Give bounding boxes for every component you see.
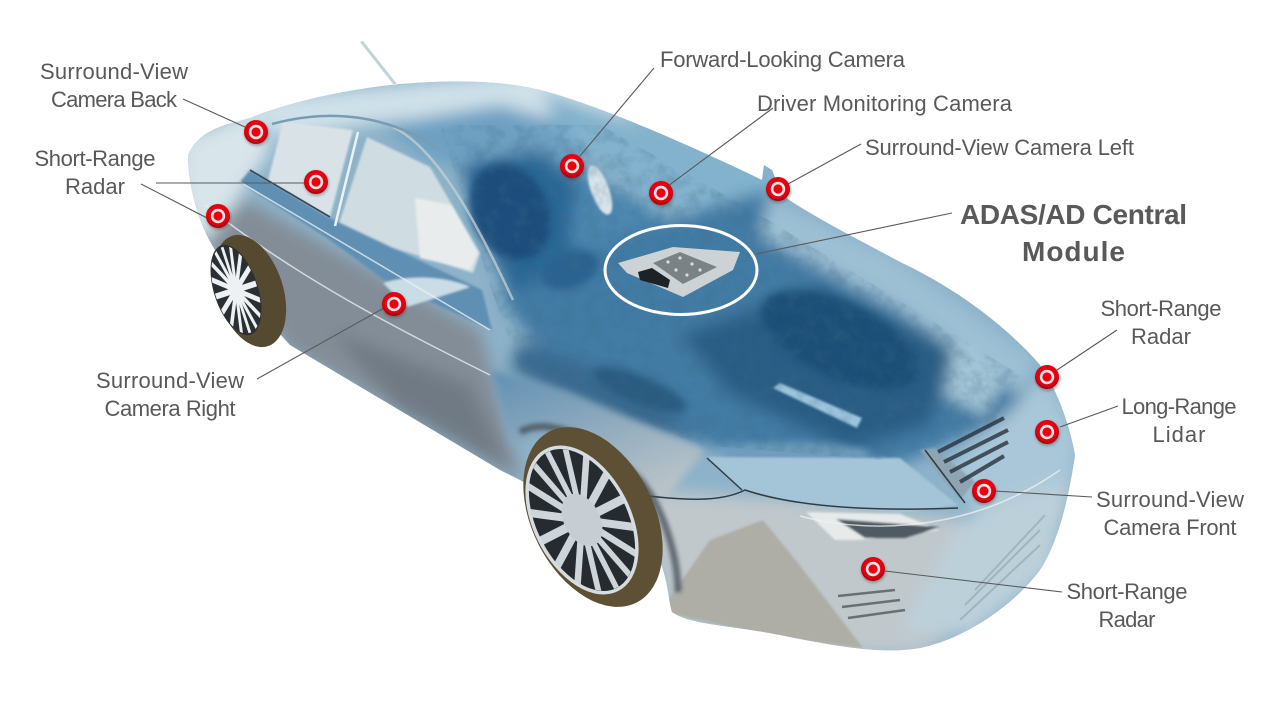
label: Driver Monitoring Camera: Driver Monitoring Camera — [757, 91, 1013, 116]
noise texture on interior and hood — [452, 125, 1018, 460]
label: Forward-Looking Camera: Forward-Looking Camera — [660, 47, 906, 72]
label: Surround-View Camera Front: Surround-View — [1096, 487, 1244, 512]
label: Short-Range Radar front bottom: Short-Range — [1066, 579, 1188, 604]
label: Short-Range Radar rear: Short-Range — [34, 146, 156, 171]
side windows and sill — [240, 122, 975, 648]
fender — [492, 370, 705, 505]
label: Surround-View Camera Right — [96, 292, 407, 421]
label: ADAS/AD Central Module — [756, 199, 1187, 267]
ECU connector — [638, 268, 670, 288]
label: Short-Range Radar front bottom: Radar — [1098, 607, 1156, 632]
label: Surround-View Camera Back: Surround-View — [40, 59, 188, 84]
label: Surround-View Camera Front — [972, 479, 1244, 540]
label: Surround-View Camera Front: Camera Front — [1104, 515, 1236, 540]
label: Surround-View Camera Left — [766, 135, 1134, 203]
label: Forward-Looking Camera — [560, 47, 906, 180]
car illustration — [180, 41, 1090, 670]
label: Driver Monitoring Camera — [649, 91, 1013, 207]
fog lamp — [838, 590, 905, 618]
label: ADAS/AD Central Module: ADAS/AD Central — [960, 199, 1187, 230]
label: Long-Range Lidar: Lidar — [1152, 422, 1206, 447]
wheel arch — [520, 427, 678, 592]
label: ADAS/AD Central Module: Module — [1022, 236, 1125, 267]
label: Short-Range Radar front top — [1035, 296, 1222, 391]
label: Surround-View Camera Right: Camera Right — [104, 396, 236, 421]
headlight and body lines — [640, 450, 965, 509]
label: Long-Range Lidar: Long-Range — [1122, 394, 1236, 419]
label: Short-Range Radar rear — [34, 146, 329, 230]
label: Short-Range Radar rear: Radar — [65, 174, 125, 199]
front wheel — [495, 404, 691, 630]
interior dark patches and engine detail — [464, 159, 918, 458]
ADAS/AD central module: highlighted ECU — [605, 226, 757, 314]
grille — [938, 418, 1008, 482]
label: Short-Range Radar front top: Radar — [1131, 324, 1191, 349]
A-pillar — [393, 127, 513, 300]
label: Short-Range Radar front top: Short-Range — [1100, 296, 1222, 321]
label: Surround-View Camera Right: Surround-View — [96, 368, 244, 393]
label: Long-Range Lidar — [1035, 394, 1236, 447]
label: Surround-View Camera Back: Camera Back — [51, 87, 178, 112]
antenna — [360, 41, 397, 84]
side window frame — [250, 170, 330, 217]
label: Surround-View Camera Back — [40, 59, 269, 146]
rear wheel — [201, 226, 299, 356]
label: Short-Range Radar front bottom — [861, 557, 1188, 632]
highlight ring — [605, 226, 757, 314]
car body — [180, 70, 1090, 670]
label: Surround-View Camera Left: Surround-View Camera Left — [865, 135, 1134, 160]
radiator mesh — [960, 515, 1045, 620]
ECU board — [618, 247, 740, 297]
